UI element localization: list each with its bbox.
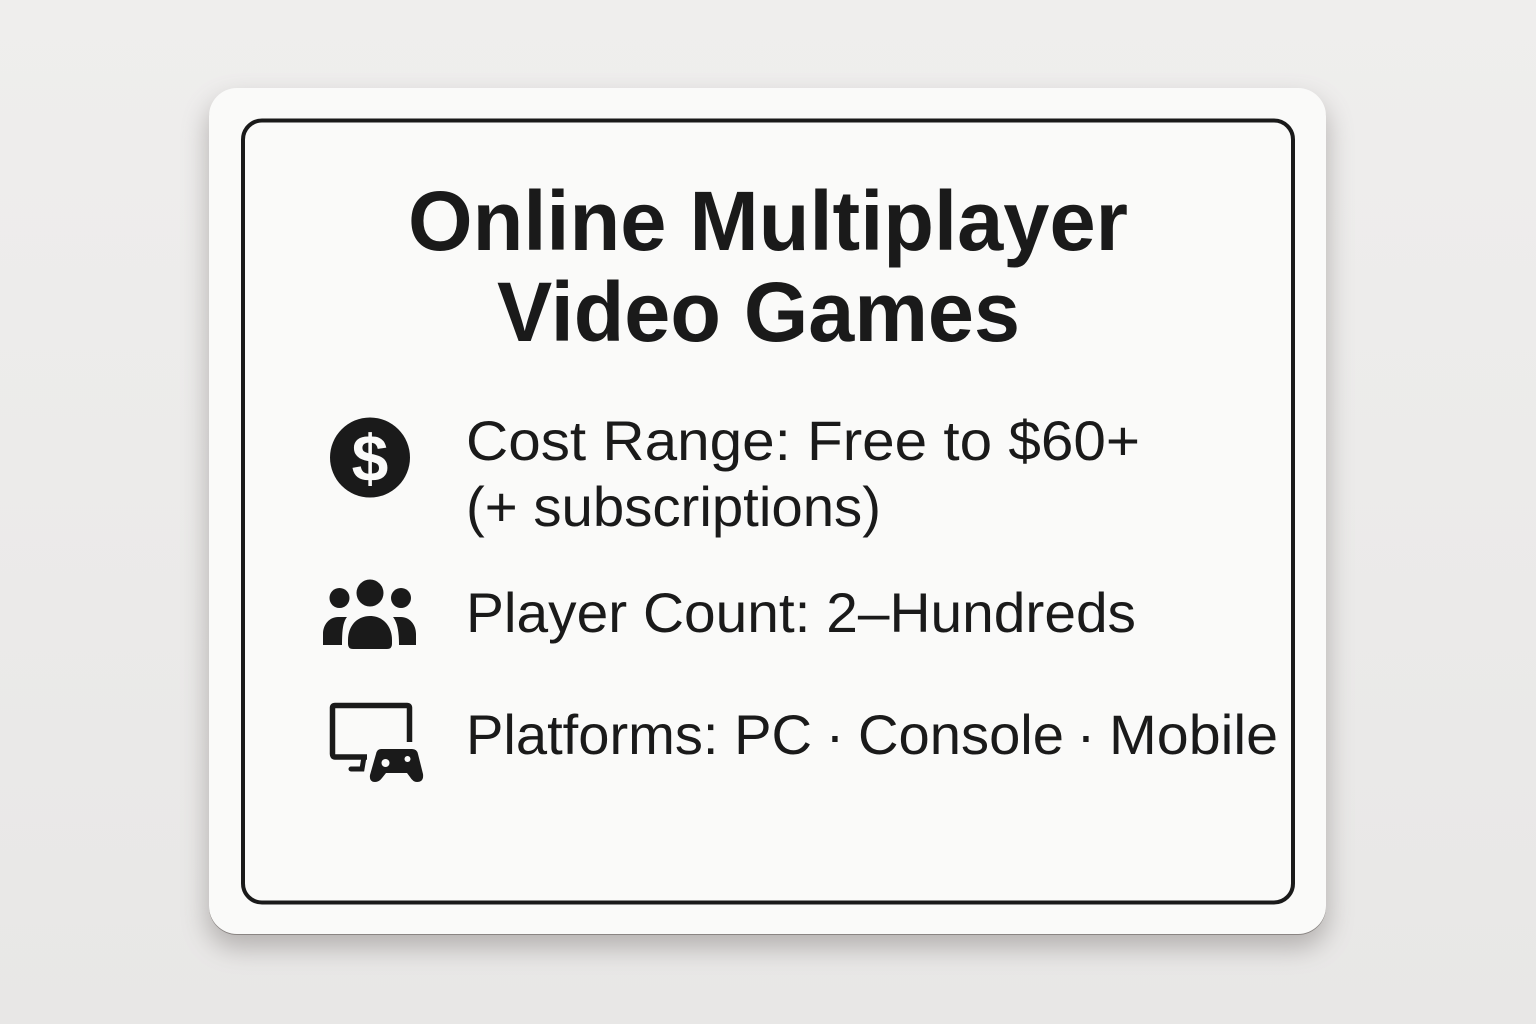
title <box>408 174 1128 359</box>
text: platforms: Console <box>858 703 1064 766</box>
text: platforms: · <box>826 703 844 766</box>
text: platforms <box>466 703 1278 766</box>
text: cost range: Cost Range: Free to $60+ <box>466 409 1140 472</box>
text: platforms: · <box>1077 703 1095 766</box>
card inner border <box>243 120 1293 902</box>
text: platforms: Mobile <box>1109 703 1278 766</box>
text: cost range <box>466 409 1140 538</box>
panel: card <box>207 88 1328 948</box>
icon: dollar coin <box>330 418 410 498</box>
icon: players group <box>323 580 416 649</box>
text: player count: Player Count: 2–Hundreds <box>466 581 1136 644</box>
title: Online Multiplayer <box>408 174 1128 268</box>
icon: dollar coin: $ <box>352 421 388 495</box>
icon: monitor with gamepad <box>332 706 423 782</box>
text: cost range: (+ subscriptions) <box>466 475 881 538</box>
title: Video Games <box>497 265 1020 359</box>
text: platforms: Platforms: PC <box>466 703 812 766</box>
